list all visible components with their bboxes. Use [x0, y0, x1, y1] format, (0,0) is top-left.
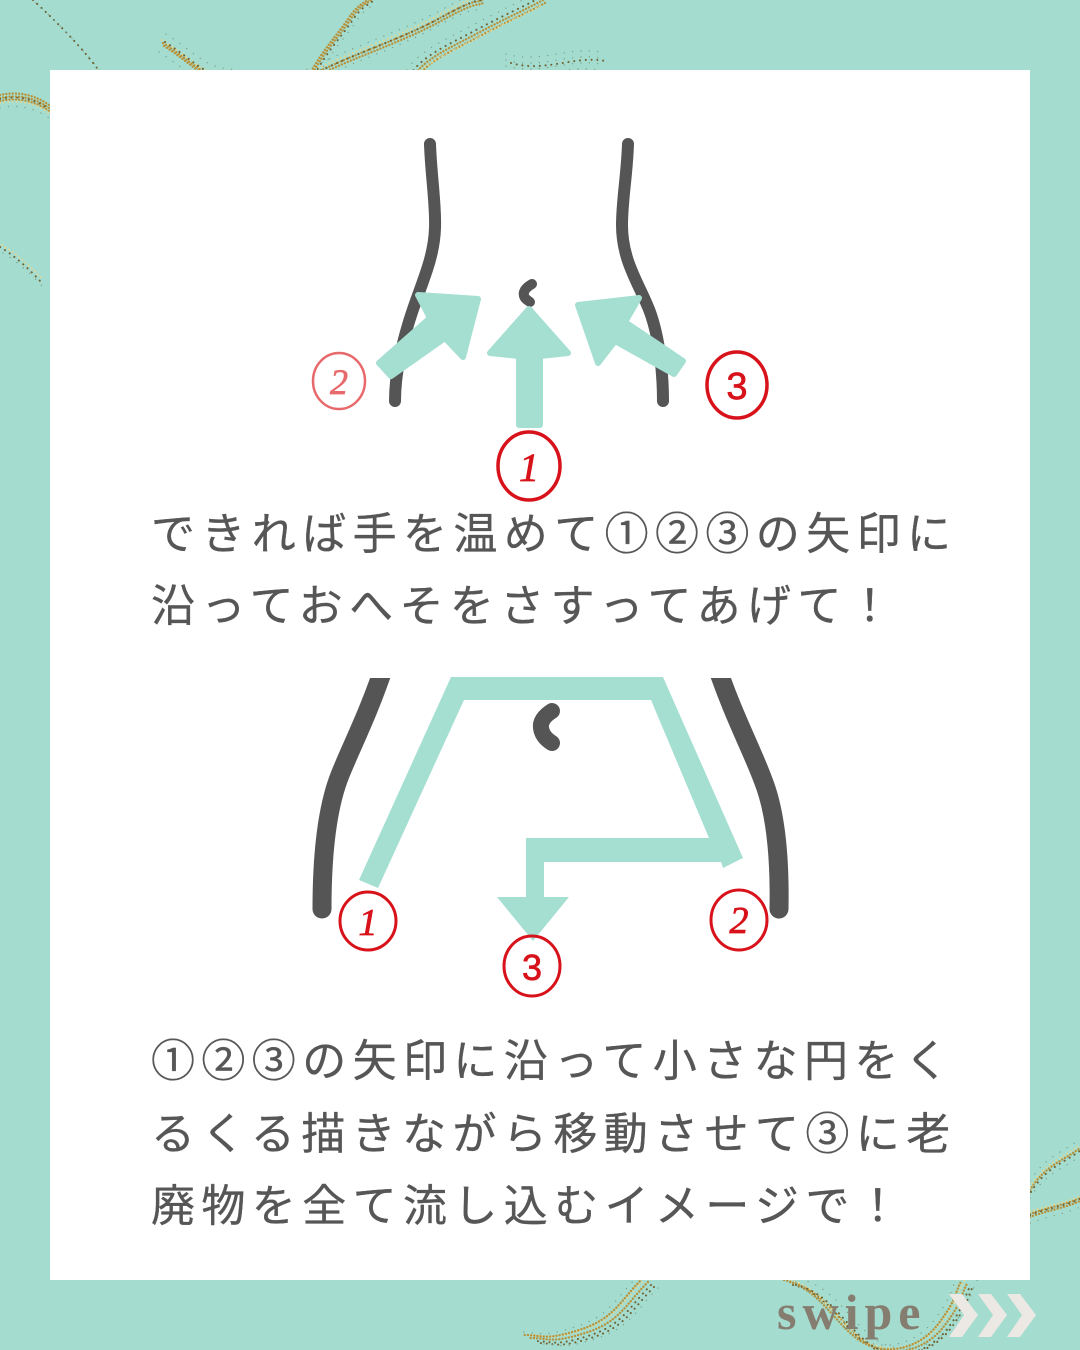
label circle 2	[313, 353, 365, 409]
label circle 1: 1	[358, 902, 378, 944]
label circle 1	[498, 432, 560, 500]
arrow 3	[578, 298, 683, 374]
right hip line	[716, 664, 779, 909]
right waist line	[622, 144, 663, 401]
diagrams	[312, 138, 1036, 1337]
path arrow	[359, 677, 743, 941]
bottom diagram: belly with path arrow	[322, 664, 779, 996]
left waist line	[395, 144, 435, 401]
swipe label: swipe	[777, 1284, 926, 1340]
left hip line	[322, 664, 385, 909]
text: second line, instruction one: 沿っておへそをさすってあげて！	[151, 582, 898, 631]
arrow 1	[490, 309, 568, 425]
text: first line, instruction one: できれば手を温めて①②③の矢印に	[151, 510, 957, 559]
label circle 2	[711, 890, 767, 950]
label circle 1: 1	[519, 445, 539, 490]
label circle 3	[707, 352, 767, 418]
text: second line, instruction two: るくる描きながら移動させて③に老	[151, 1110, 957, 1159]
label circle 2: 2	[730, 900, 748, 942]
label circle 3	[504, 936, 560, 996]
text: first line, instruction two: ①②③の矢印に沿って小さな円をく	[151, 1037, 955, 1086]
navel	[524, 284, 532, 302]
label circle 3: 3	[726, 366, 748, 408]
label circle 1	[340, 892, 396, 950]
top diagram: belly with three arrows toward navel	[313, 144, 767, 500]
swipe chevrons	[949, 1294, 1036, 1337]
text: third line, instruction two: 廃物を全て流し込むイメージで！	[151, 1182, 906, 1231]
label circle 3: 3	[522, 947, 542, 988]
label circle 2: 2	[330, 362, 348, 402]
arrow 2	[379, 295, 478, 376]
navel	[541, 711, 552, 743]
